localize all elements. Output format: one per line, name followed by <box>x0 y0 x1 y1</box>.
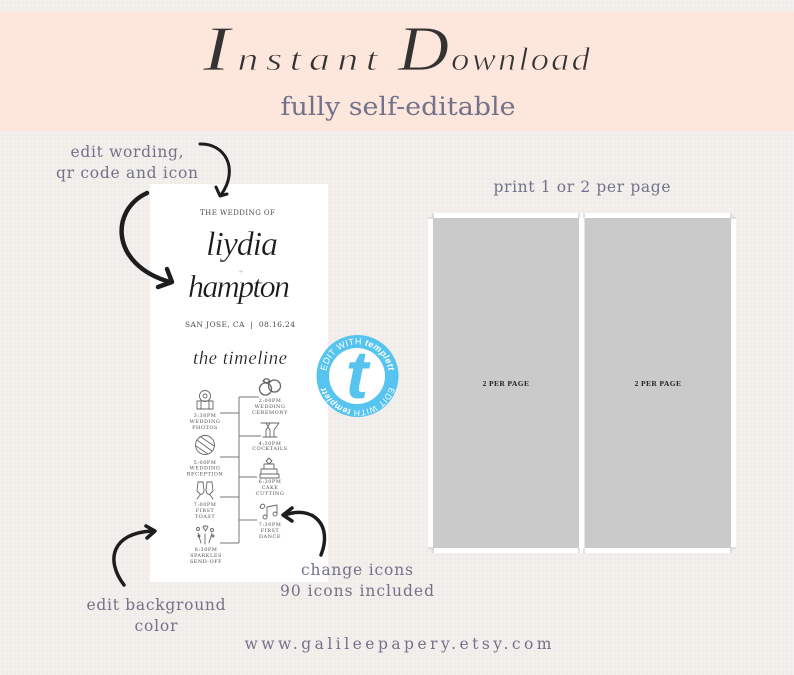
event: cake cutting: CAKE <box>262 485 278 491</box>
event: wedding ceremony: 2:00PM <box>259 398 281 404</box>
event: wedding photos: PHOTOS <box>192 425 218 431</box>
event: sparkles send-off: SEND-OFF <box>190 559 222 565</box>
label: edit wording: edit wording, <box>70 143 184 161</box>
arrow: to background <box>114 526 155 585</box>
event: wedding reception: RECEPTION <box>187 472 223 478</box>
right placeholder: 2 PER PAGE <box>635 379 681 388</box>
event: wedding ceremony <box>252 379 288 416</box>
event: first dance <box>259 504 281 540</box>
location and date: SAN JOSE, CA | 08.16.24 <box>185 320 295 329</box>
title: Instant Download <box>202 13 592 84</box>
event: sparkles send-off: SPARKLES <box>190 553 222 559</box>
arrow: to names <box>122 193 172 287</box>
card heading: THE WEDDING OF <box>200 209 275 217</box>
names: hampton <box>188 268 290 304</box>
names: liydia <box>206 226 278 263</box>
event: cocktails: 4:30PM <box>259 441 281 447</box>
arrow: to icons <box>283 508 325 555</box>
label: edit wording: qr code and icon <box>56 164 198 182</box>
label: edit background color: edit background <box>86 596 226 614</box>
badge: edit with templett: EDIT WITH templett <box>320 338 394 370</box>
left placeholder <box>433 218 579 548</box>
event: wedding photos: WEDDING <box>190 419 220 425</box>
event: cake cutting: CUTTING <box>256 491 284 497</box>
event: first dance: DANCE <box>259 534 281 540</box>
event: wedding reception: 5:00PM <box>194 460 216 466</box>
event: first toast: 7:00PM <box>194 502 216 508</box>
badge: edit with templett: t <box>346 337 371 413</box>
event: sparkles send-off: 8:30PM <box>195 547 217 553</box>
event: cocktails <box>252 423 288 452</box>
event: wedding ceremony: WEDDING <box>255 404 285 410</box>
arrow: to wording <box>200 144 229 196</box>
event: first toast <box>194 482 216 520</box>
label: edit background color: color <box>134 617 178 635</box>
event: wedding reception <box>187 436 223 478</box>
right placeholder <box>584 218 731 548</box>
event: cake cutting: 6:30PM <box>259 479 281 485</box>
subheading: the timeline: the timeline <box>193 348 287 369</box>
event: cocktails: COCKTAILS <box>252 446 288 452</box>
event: first dance: FIRST <box>261 528 279 534</box>
event: sparkles send-off <box>190 526 222 565</box>
names <box>188 226 290 304</box>
panel: timeline card <box>150 184 328 582</box>
event: wedding reception: WEDDING <box>190 466 220 472</box>
badge: edit with templett: EDIT WITH templett <box>320 388 395 416</box>
title: Instant Download: Download <box>397 13 592 84</box>
header band <box>0 12 794 131</box>
timeline connector lines <box>220 397 261 543</box>
event: first toast: TOAST <box>195 514 215 520</box>
event: cake cutting <box>256 458 284 497</box>
label: print per page: print 1 or 2 per page <box>494 178 670 196</box>
event: first dance: 7:30PM <box>259 522 281 528</box>
names: + <box>238 267 244 278</box>
label: change icons: change icons <box>301 561 413 579</box>
title: Instant Download: Instant <box>202 13 385 84</box>
event: wedding photos <box>190 390 220 431</box>
panel: print sheet <box>428 213 736 553</box>
event: wedding ceremony: CEREMONY <box>252 410 288 416</box>
label: change icons: 90 icons included <box>280 582 434 600</box>
subtitle: fully self-editable <box>280 92 516 121</box>
badge: edit with templett <box>316 335 398 417</box>
event: first toast: FIRST <box>196 508 214 514</box>
website footer: www.galileepapery.etsy.com <box>244 635 552 653</box>
left placeholder: 2 PER PAGE <box>483 379 529 388</box>
event: wedding photos: 3:30PM <box>194 413 216 419</box>
